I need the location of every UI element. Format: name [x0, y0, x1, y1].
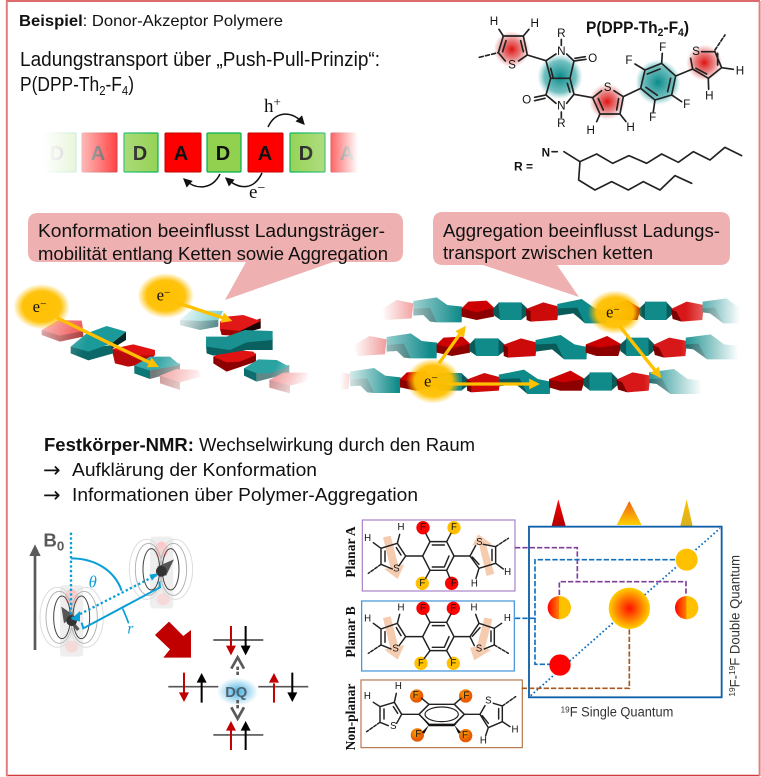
projection peaks: [552, 499, 693, 526]
chart: 2D NMR spectrum: [515, 499, 742, 720]
callout: Konformation: Konformation beeinflusst Ladungsträger-: [38, 220, 385, 241]
panel: Non-planar: F: [463, 690, 469, 701]
panel: Planar B: F: [418, 658, 424, 669]
B0 arrow: 0: [57, 539, 64, 554]
panel: Planar B: F: [420, 603, 426, 614]
text: Festkörper-NMR: [43, 435, 475, 507]
donor-acceptor chain: A: [91, 143, 105, 165]
panel: Planar A: [362, 520, 515, 591]
text: Ladungstransport: P(DPP-Th: [20, 74, 111, 96]
electron glow: upper chain: [588, 290, 642, 334]
donor-acceptor chain: D: [50, 143, 64, 165]
diagram: dipolar coupling: [29, 530, 308, 750]
axis label: y: 19: [727, 666, 737, 675]
molecule: P(DPP-Th2-F4): [479, 15, 744, 137]
panel: Planar B: H: [398, 602, 405, 613]
connector lines: [515, 548, 686, 688]
molecule: P(DPP-Th2-F4): S: [604, 81, 612, 94]
panel: Planar A: H: [471, 578, 478, 589]
dipole field lower: [40, 585, 103, 657]
panel: Planar A: F: [451, 578, 457, 589]
electron glow: lower chain: −: [431, 373, 438, 385]
text: Ladungstransport: Ladungstransport über „Push-Pull-Prinzip“:: [20, 49, 380, 71]
title: molecule name: -F: [663, 19, 678, 37]
dipole field upper: [129, 537, 193, 608]
panel: Planar B: [362, 601, 514, 671]
label: h+: +: [274, 94, 281, 109]
text: Festkörper-NMR: Informationen über Polymer-Aggregation: [72, 485, 418, 505]
panel: Non-planar: F: [413, 690, 419, 701]
panels: conformers: [361, 520, 522, 748]
axis label: y: F Double Quantum: [727, 555, 742, 666]
axis label: x: F Single Quantum: [570, 705, 673, 720]
electron glow: lower chain: e: [424, 371, 431, 390]
labels: conformers: Planar A: [343, 526, 358, 578]
angle and distance marks: [71, 533, 160, 637]
arrow: transport along chain A: [57, 318, 156, 366]
diagram: polymer chain conformation B: [180, 310, 308, 393]
spin lower: [61, 607, 78, 630]
panel: Planar A: H: [364, 533, 371, 544]
arrow: red: [155, 622, 191, 658]
title: molecule name: 4: [678, 27, 685, 39]
side chain R: R =: [514, 160, 533, 174]
molecule: P(DPP-Th2-F4): F: [683, 98, 690, 111]
panel: Non-planar: S: [390, 721, 397, 732]
text: Festkörper-NMR: Aufklärung der Konformation: [72, 460, 317, 480]
B0 arrow: [29, 530, 64, 650]
chain row 1: [382, 297, 753, 323]
molecule: P(DPP-Th2-F4): N: [557, 99, 566, 112]
title: molecule name: ): [684, 19, 689, 37]
callout: Aggregation: Aggregation beeinflusst Ladungs-: [443, 220, 720, 241]
panel: Non-planar: H: [480, 735, 487, 746]
panel: Non-planar: F: [415, 729, 421, 740]
axis label: y: 19: [727, 687, 737, 697]
molecule: P(DPP-Th2-F4): O: [522, 93, 531, 106]
title: molecule name: 2: [658, 27, 663, 39]
panel: Non-planar: F: [462, 730, 468, 741]
molecule: P(DPP-Th2-F4): R: [557, 117, 566, 130]
panel: Non-planar: S: [485, 695, 492, 706]
text: Ladungstransport: -F: [105, 74, 122, 96]
callout: Aggregation: [433, 212, 730, 297]
panel: Non-planar: H: [395, 681, 402, 692]
panel: Planar A: F: [420, 522, 426, 533]
label: e-: e: [249, 182, 257, 203]
text: Ladungstransport: [20, 49, 380, 98]
panel: Non-planar: H: [511, 724, 518, 735]
molecule: P(DPP-Th2-F4): O: [588, 52, 597, 65]
molecule: P(DPP-Th2-F4): F: [659, 41, 666, 54]
donor-acceptor chain: D: [133, 143, 147, 165]
panel: Planar B: F: [450, 658, 456, 669]
panel: Planar B: F: [450, 603, 456, 614]
panel: Planar A: H: [398, 522, 405, 533]
electron glow B: e: [157, 286, 164, 305]
electron glow A: −: [40, 298, 46, 310]
panel: Planar B: H: [470, 602, 477, 613]
title: molecule name: P(DPP-Th: [586, 19, 662, 37]
text: Festkörper-NMR: →: [43, 458, 61, 482]
chain row 3: [317, 368, 701, 394]
labels: conformers: Planar B: [343, 606, 358, 658]
angle and distance marks: r: [127, 620, 134, 637]
molecule: P(DPP-Th2-F4): H: [586, 124, 595, 137]
arrows: interchain transport: [439, 326, 659, 384]
cross peaks: [548, 549, 698, 676]
molecule: P(DPP-Th2-F4): H: [530, 17, 539, 30]
molecule: P(DPP-Th2-F4): H: [490, 15, 498, 28]
electron glow: upper chain: e: [606, 303, 613, 322]
panel: Planar A: F: [451, 522, 457, 533]
label: e-: −: [257, 181, 265, 196]
B0 arrow: B: [43, 530, 57, 551]
axis label: x: 19: [561, 704, 570, 714]
labels: conformers: [343, 526, 358, 750]
donor-acceptor chain: A: [340, 143, 354, 165]
panel: Planar B: S: [476, 643, 482, 654]
molecule: P(DPP-Th2-F4): H: [626, 121, 635, 134]
molecule: P(DPP-Th2-F4): H: [705, 89, 714, 102]
molecule: P(DPP-Th2-F4): S: [508, 58, 516, 71]
axis label: y: F-: [727, 675, 742, 687]
callout: Konformation: mobilität entlang Ketten sowie Aggregation: [38, 243, 388, 264]
text: Ladungstransport: 2: [99, 83, 105, 98]
donor-acceptor chain: D: [216, 143, 230, 165]
panel: Non-planar: H: [364, 691, 371, 702]
heading: Beispiel: Beispiel: Donor-Akzeptor Polymere: [19, 13, 283, 30]
electron glow B: −: [164, 287, 170, 299]
panel: Planar A: S: [393, 563, 400, 574]
donor-acceptor chain: [43, 133, 367, 172]
callout: Aggregation: transport zwischen ketten: [443, 242, 653, 263]
donor-acceptor chain: D: [299, 143, 313, 165]
molecule: P(DPP-Th2-F4): N: [557, 45, 566, 58]
labels: conformers: Non-planar: [343, 684, 358, 750]
panel: Planar B: H: [504, 613, 511, 624]
energy level diagram: DQ: [225, 685, 247, 701]
arrows: charge hopping: [185, 114, 303, 187]
molecule: P(DPP-Th2-F4): S: [692, 45, 700, 58]
panel: Planar A: H: [504, 567, 511, 578]
molecule: P(DPP-Th2-F4): F: [625, 54, 633, 67]
diagram: aggregated polymer chains: [317, 290, 753, 404]
panel: Planar B: S: [392, 643, 399, 654]
molecule: P(DPP-Th2-F4): R: [557, 27, 566, 40]
panel: Planar B: H: [364, 613, 371, 624]
text: Ladungstransport: 4: [122, 83, 128, 98]
panel: Planar A: F: [419, 578, 425, 589]
spin upper: [156, 559, 174, 577]
energy level diagram: [168, 626, 308, 750]
callout: Konformation: [28, 213, 403, 300]
electron glow A: e: [33, 297, 40, 316]
text: Festkörper-NMR: Festkörper-NMR: Wechselwirkung durch den Raum: [44, 435, 475, 455]
molecule: P(DPP-Th2-F4): F: [649, 111, 656, 124]
side chain R: N: [542, 147, 550, 160]
text: Ladungstransport: ): [128, 74, 134, 96]
donor-acceptor chain: A: [258, 143, 272, 165]
chain row 2: [354, 333, 738, 359]
molecule: P(DPP-Th2-F4): H: [736, 64, 744, 77]
panel: Planar A: S: [476, 537, 483, 548]
side chain R: [514, 147, 742, 190]
text: Festkörper-NMR: →: [43, 483, 61, 507]
label: h+: h: [264, 96, 274, 117]
diagram: polymer chain conformation A: [42, 320, 202, 390]
electron glow B: [137, 273, 194, 318]
panel: Non-planar: [361, 680, 522, 748]
arrow: transport along chain B: [176, 302, 229, 320]
angle and distance marks: θ: [89, 572, 97, 591]
electron glow A: [13, 284, 70, 329]
donor-acceptor chain: A: [174, 143, 188, 165]
electron glow: lower chain: [406, 358, 461, 404]
electron glow: upper chain: −: [613, 304, 620, 316]
